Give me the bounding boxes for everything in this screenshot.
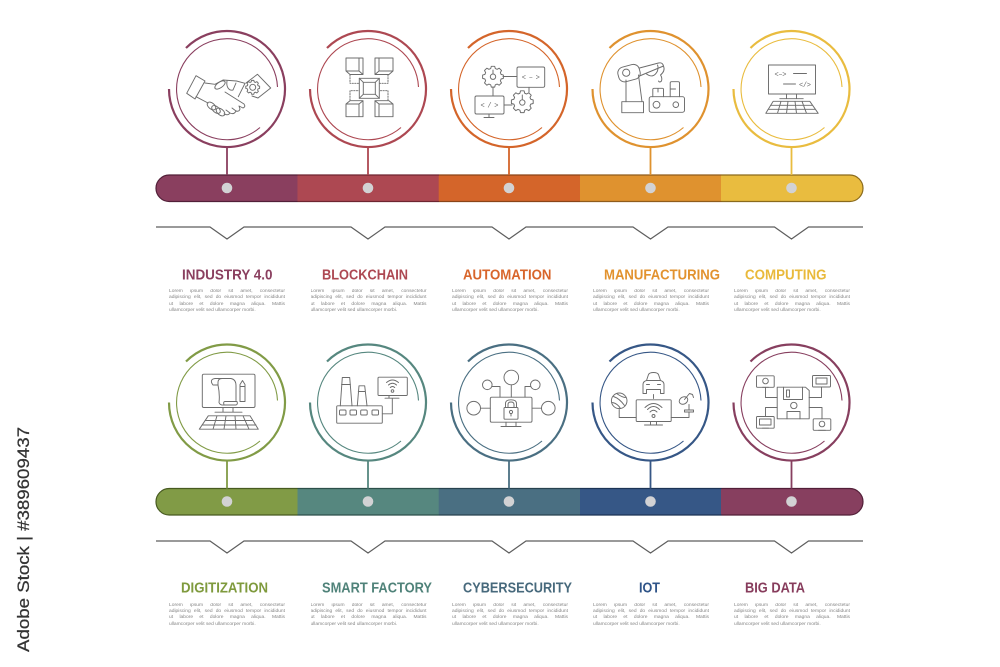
icon: computer with code: </> [799,82,811,90]
text block: big data: adipiscing elit, sed do eiusmod tempor incididunt [734,609,850,614]
icon: handshake with gear [187,74,271,118]
text block: manufacturing: adipiscing elit, sed do eiusmod tempor incididunt [593,295,709,300]
text block: cybersecurity: ullamcorper velit sed ullamcorper morbi. [452,622,539,627]
heading: digitization: DIGITIZATION [181,580,268,596]
text block: automation: ut labore et dolore magna aliqua. Mattis [452,302,568,307]
text block: digitization: ut labore et dolore magna aliqua. Mattis [169,615,285,620]
icon: computer with scroll and pencil [199,374,258,429]
text block: iot: adipiscing elit, sed do eiusmod tempor incididunt [593,609,709,614]
heading: blockchain: BLOCKCHAIN [322,267,408,283]
text block: big data: ut labore et dolore magna aliqua. Mattis [734,615,850,620]
text block: big data [734,580,852,629]
node: smart factory [310,345,426,488]
heading: automation: AUTOMATION [463,267,552,283]
icon: computer with code: <–> [774,72,786,80]
text block: iot: ullamcorper velit sed ullamcorper morbi. [593,622,680,627]
icon: connected devices [611,372,694,425]
text block: automation [452,267,570,315]
text block: automation: ullamcorper velit sed ullamcorper morbi. [452,308,539,313]
node: automation [451,31,567,175]
heading: computing: COMPUTING [745,267,826,283]
text block: manufacturing: ut labore et dolore magna aliqua. Mattis [593,302,709,307]
text block: automation: adipiscing elit, sed do eiusmod tempor incididunt [452,295,568,300]
notched divider: bottom row [156,541,863,553]
icon: factory and wifi monitor [337,377,407,423]
text block: computing: Lorem ipsum dolor sit amet, consectetur [734,289,850,294]
text block: cybersecurity: adipiscing elit, sed do eiusmod tempor incididunt [452,609,568,614]
text block: blockchain: ullamcorper velit sed ullamcorper morbi. [310,308,397,313]
text block: cybersecurity: Lorem ipsum dolor sit amet, consectetur [452,603,568,608]
text block: big data: ullamcorper velit sed ullamcorper morbi. [734,622,821,627]
text block: industry 4.0: adipiscing elit, sed do eiusmod tempor incididunt [169,295,285,300]
text block: blockchain: adipiscing elit, sed do eiusmod tempor incididunt [310,295,426,300]
text block: cybersecurity [452,580,572,629]
text block: smart factory: Lorem ipsum dolor sit amet, consectetur [310,603,426,608]
text block: industry 4.0: Lorem ipsum dolor sit amet, consectetur [169,289,285,294]
timeline bar: top row [156,175,863,202]
node: industry 4.0 [169,31,285,175]
icon: gears and code screens: </> [480,102,498,110]
text block: automation: Lorem ipsum dolor sit amet, consectetur [452,289,568,294]
icon: network lock [467,370,555,426]
node: iot [592,345,708,488]
heading: industry 4.0: INDUSTRY 4.0 [182,267,272,283]
heading: cybersecurity: CYBERSECURITY [463,580,572,596]
text block: computing: adipiscing elit, sed do eiusmod tempor incididunt [734,295,850,300]
text block: smart factory: ullamcorper velit sed ullamcorper morbi. [310,622,397,627]
node: cybersecurity [451,345,567,488]
text block: digitization: ullamcorper velit sed ullamcorper morbi. [169,622,256,627]
text block: cybersecurity: ut labore et dolore magna aliqua. Mattis [452,615,568,620]
text block: smart factory [310,580,432,629]
icon: blockchain cubes [346,58,393,117]
node: computing [734,31,850,175]
text block: computing: ut labore et dolore magna aliqua. Mattis [734,302,850,307]
text block: manufacturing: ullamcorper velit sed ullamcorper morbi. [593,308,680,313]
heading: smart factory: SMART FACTORY [322,580,432,596]
text block: computing: ullamcorper velit sed ullamcorper morbi. [734,308,821,313]
node: digitization [169,345,285,488]
text block: digitization: adipiscing elit, sed do eiusmod tempor incididunt [169,609,285,614]
heading: iot: IOT [639,580,660,596]
text block: digitization [169,580,287,629]
icon: floppy and monitors [756,376,831,430]
icon: computer with code [766,65,818,113]
text block: industry 4.0: ut labore et dolore magna aliqua. Mattis [169,302,285,307]
text block: smart factory: adipiscing elit, sed do eiusmod tempor incididunt [310,609,426,614]
text block: big data: Lorem ipsum dolor sit amet, consectetur [734,603,850,608]
notched divider: top row [156,227,863,239]
text block: manufacturing: Lorem ipsum dolor sit amet, consectetur [593,289,709,294]
text block: smart factory: ut labore et dolore magna aliqua. Mattis [310,615,426,620]
text block: iot [593,580,711,629]
icon: robot arm and machine [616,63,684,113]
text block: manufacturing [593,267,720,315]
node: manufacturing [592,31,708,175]
text block: iot: ut labore et dolore magna aliqua. Mattis [593,615,709,620]
icon: gears and code screens: <–> [522,74,540,82]
text block: industry 4.0 [169,267,287,315]
text block: blockchain: Lorem ipsum dolor sit amet, consectetur [310,289,426,294]
text block: blockchain: ut labore et dolore magna aliqua. Mattis [310,302,426,307]
heading: big data: BIG DATA [745,580,805,596]
timeline bar: bottom row [156,488,863,515]
infographic canvas [16,30,864,652]
node: blockchain [310,31,426,175]
stock id vertical caption: Adobe Stock | #389609437 [14,427,33,652]
text block: computing [734,267,852,315]
icon: gears and code screens [475,66,545,118]
text block: industry 4.0: ullamcorper velit sed ullamcorper morbi. [169,308,256,313]
node: big data [734,345,850,488]
text block: iot: Lorem ipsum dolor sit amet, consectetur [593,603,709,608]
text block: digitization: Lorem ipsum dolor sit amet, consectetur [169,603,285,608]
text block: blockchain [310,267,428,315]
heading: manufacturing: MANUFACTURING [604,267,720,283]
